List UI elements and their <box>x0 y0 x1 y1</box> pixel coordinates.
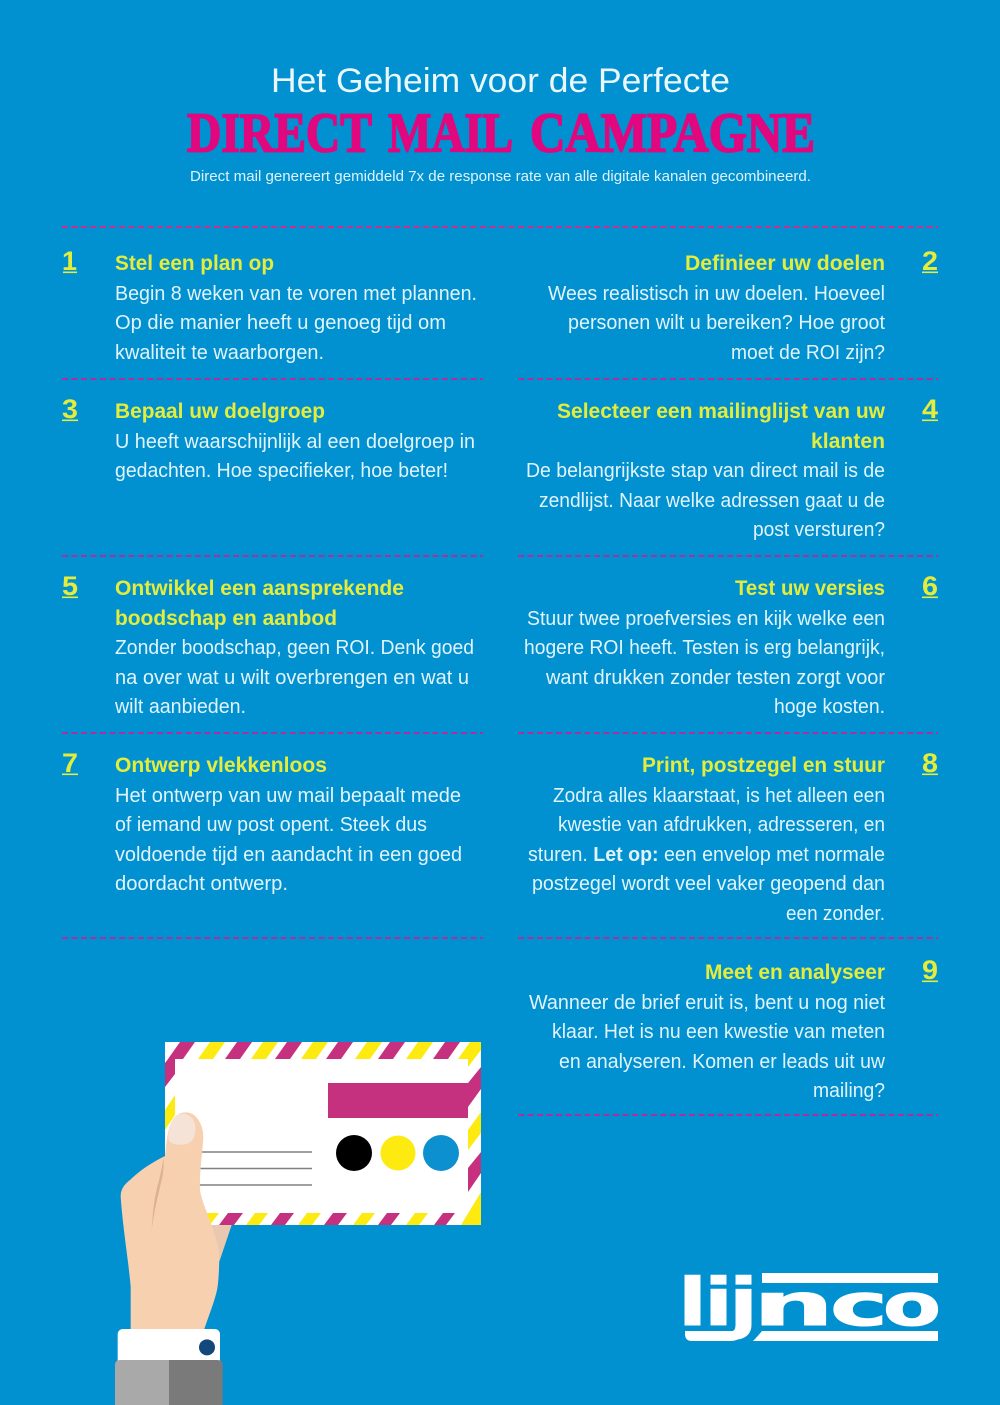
body step 1: Begin 8 weken van te voren met plannen. <box>115 283 477 305</box>
number 1: 1 <box>62 246 77 276</box>
magenta airmail stripes <box>165 1042 481 1225</box>
heading step 4: Selecteer een mailinglijst van uw <box>557 400 886 423</box>
body step 4: post versturen? <box>753 519 885 541</box>
number 2: 2 <box>922 246 938 276</box>
yellow dot <box>380 1136 416 1170</box>
number 6: 6 <box>922 571 938 601</box>
body step 8: postzegel wordt veel vaker geopend dan <box>532 873 885 895</box>
body step 7: Het ontwerp van uw mail bepaalt mede <box>115 785 461 807</box>
body step 9 <box>529 992 886 1102</box>
heading step 6: Test uw versies <box>735 577 885 600</box>
icon: envelope <box>165 1042 481 1225</box>
body step 3 <box>115 431 475 482</box>
heading step 7: Ontwerp vlekkenloos <box>115 754 327 777</box>
number 7: 7 <box>62 748 78 778</box>
logo wordmark: j <box>725 1264 758 1341</box>
body step 4: zendlijst. Naar welke adressen gaat u de <box>539 490 885 512</box>
panel: step 8 <box>528 748 938 925</box>
heading step 5: boodschap en aanbod <box>115 607 337 630</box>
heading step 4 <box>557 400 886 453</box>
body step 8: kwestie van afdrukken, adresseren, en <box>558 814 885 836</box>
subtitle: Direct mail genereert gemiddeld 7x de response rate van alle digitale kanalen gecombineerd. <box>190 169 811 185</box>
number 5: 5 <box>62 571 78 601</box>
logo wordmark: n <box>753 1271 834 1339</box>
logo wordmark: i <box>704 1264 734 1341</box>
icon: hand holding envelope <box>115 1112 232 1405</box>
cuff button <box>199 1339 215 1355</box>
body step 1: kwaliteit te waarborgen. <box>115 342 324 364</box>
body step 2: personen wilt u bereiken? Hoe groot <box>568 312 885 334</box>
body step 7: voldoende tijd en aandacht in een goed <box>115 844 462 866</box>
address lines <box>199 1152 312 1185</box>
body step 9: klaar. Het is nu een kwestie van meten <box>552 1021 885 1043</box>
number 4: 4 <box>922 394 938 424</box>
heading step 4: klanten <box>811 430 885 453</box>
number 8: 8 <box>922 748 938 778</box>
number 9: 9 <box>922 955 938 985</box>
number 3: 3 <box>62 394 78 424</box>
logo wordmark: l <box>678 1264 708 1341</box>
body step 3: U heeft waarschijnlijk al een doelgroep in <box>115 431 475 453</box>
shirt cuff <box>118 1329 220 1366</box>
main heading: MAIL <box>388 102 513 164</box>
heading step 8: Print, postzegel en stuur <box>642 754 885 777</box>
blue dot <box>423 1135 459 1171</box>
panel: step 4 <box>526 394 938 541</box>
body step 5: Zonder boodschap, geen ROI. Denk goed <box>115 637 474 659</box>
panel: step 1 <box>62 246 477 364</box>
body step 3: gedachten. Hoe specifieker, hoe beter! <box>115 460 448 482</box>
panel: step 3 <box>62 394 475 482</box>
heading step 2: Definieer uw doelen <box>685 252 885 275</box>
body step 5: na over wat u wilt overbrengen en wat u <box>115 667 469 689</box>
heading step 9: Meet en analyseer <box>705 961 885 984</box>
yellow airmail stripes <box>165 1042 481 1225</box>
logo upper bar <box>762 1273 938 1283</box>
logo wordmark <box>678 1264 941 1341</box>
body step 4: De belangrijkste stap van direct mail is de <box>526 460 885 482</box>
body step 6: Stuur twee proefversies en kijk welke een <box>527 608 885 630</box>
heading step 5: Ontwikkel een aansprekende <box>115 577 404 600</box>
body step 8 <box>528 785 885 925</box>
body step 7 <box>115 785 462 895</box>
body step 7: of iemand uw post opent. Steek dus <box>115 814 427 836</box>
body step 6 <box>524 608 885 718</box>
thumb crease <box>152 1158 164 1230</box>
body step 6: want drukken zonder testen zorgt voor <box>545 667 885 689</box>
body step 8: Zodra alles klaarstaat, is het alleen een <box>553 785 885 807</box>
stamp bar <box>328 1083 468 1118</box>
panel: step 7 <box>62 748 462 895</box>
panel: step 9 <box>529 955 938 1102</box>
title line: Het Geheim voor de Perfecte <box>271 62 730 100</box>
body step 7: doordacht ontwerp. <box>115 873 288 895</box>
body step 9: mailing? <box>813 1080 885 1102</box>
body step 8: een zonder. <box>786 903 885 925</box>
main heading: CAMPAGNE <box>530 102 815 164</box>
body step 6: hoge kosten. <box>774 696 885 718</box>
main heading: DIRECT <box>187 102 372 164</box>
panel: step 2 <box>548 246 938 364</box>
panel: step 5 <box>62 571 474 718</box>
body step 5: wilt aanbieden. <box>114 696 246 718</box>
main heading <box>187 102 815 164</box>
thumbnail <box>168 1114 195 1145</box>
body step 9: Wanneer de brief eruit is, bent u nog niet <box>529 992 885 1014</box>
heading step 3: Bepaal uw doelgroep <box>115 400 325 423</box>
body step 1: Op die manier heeft u genoeg tijd om <box>115 312 446 334</box>
hand <box>121 1112 219 1330</box>
body step 2 <box>548 283 885 364</box>
panel: step 6 <box>524 571 938 718</box>
logo lower bar left <box>685 1331 742 1341</box>
body step 6: hogere ROI heeft. Testen is erg belangrijk, <box>524 637 885 659</box>
body step 2: moet de ROI zijn? <box>731 342 885 364</box>
sleeve <box>115 1360 223 1405</box>
logo lower bar right <box>753 1331 938 1341</box>
fingers behind envelope <box>210 1225 232 1262</box>
black dot <box>336 1135 372 1171</box>
body step 9: en analyseren. Komen er leads uit uw <box>559 1051 886 1073</box>
body step 4 <box>526 460 885 541</box>
logo wordmark: c <box>830 1271 888 1339</box>
body step 5 <box>114 637 474 718</box>
heading step 5 <box>115 577 404 630</box>
body step 8: sturen. Let op: een envelop met normale <box>528 844 885 866</box>
body step 2: Wees realistisch in uw doelen. Hoeveel <box>548 283 885 305</box>
heading step 1: Stel een plan op <box>115 252 274 275</box>
logo: lijnco <box>678 1264 941 1341</box>
logo wordmark: o <box>883 1271 941 1339</box>
body step 1 <box>115 283 477 364</box>
